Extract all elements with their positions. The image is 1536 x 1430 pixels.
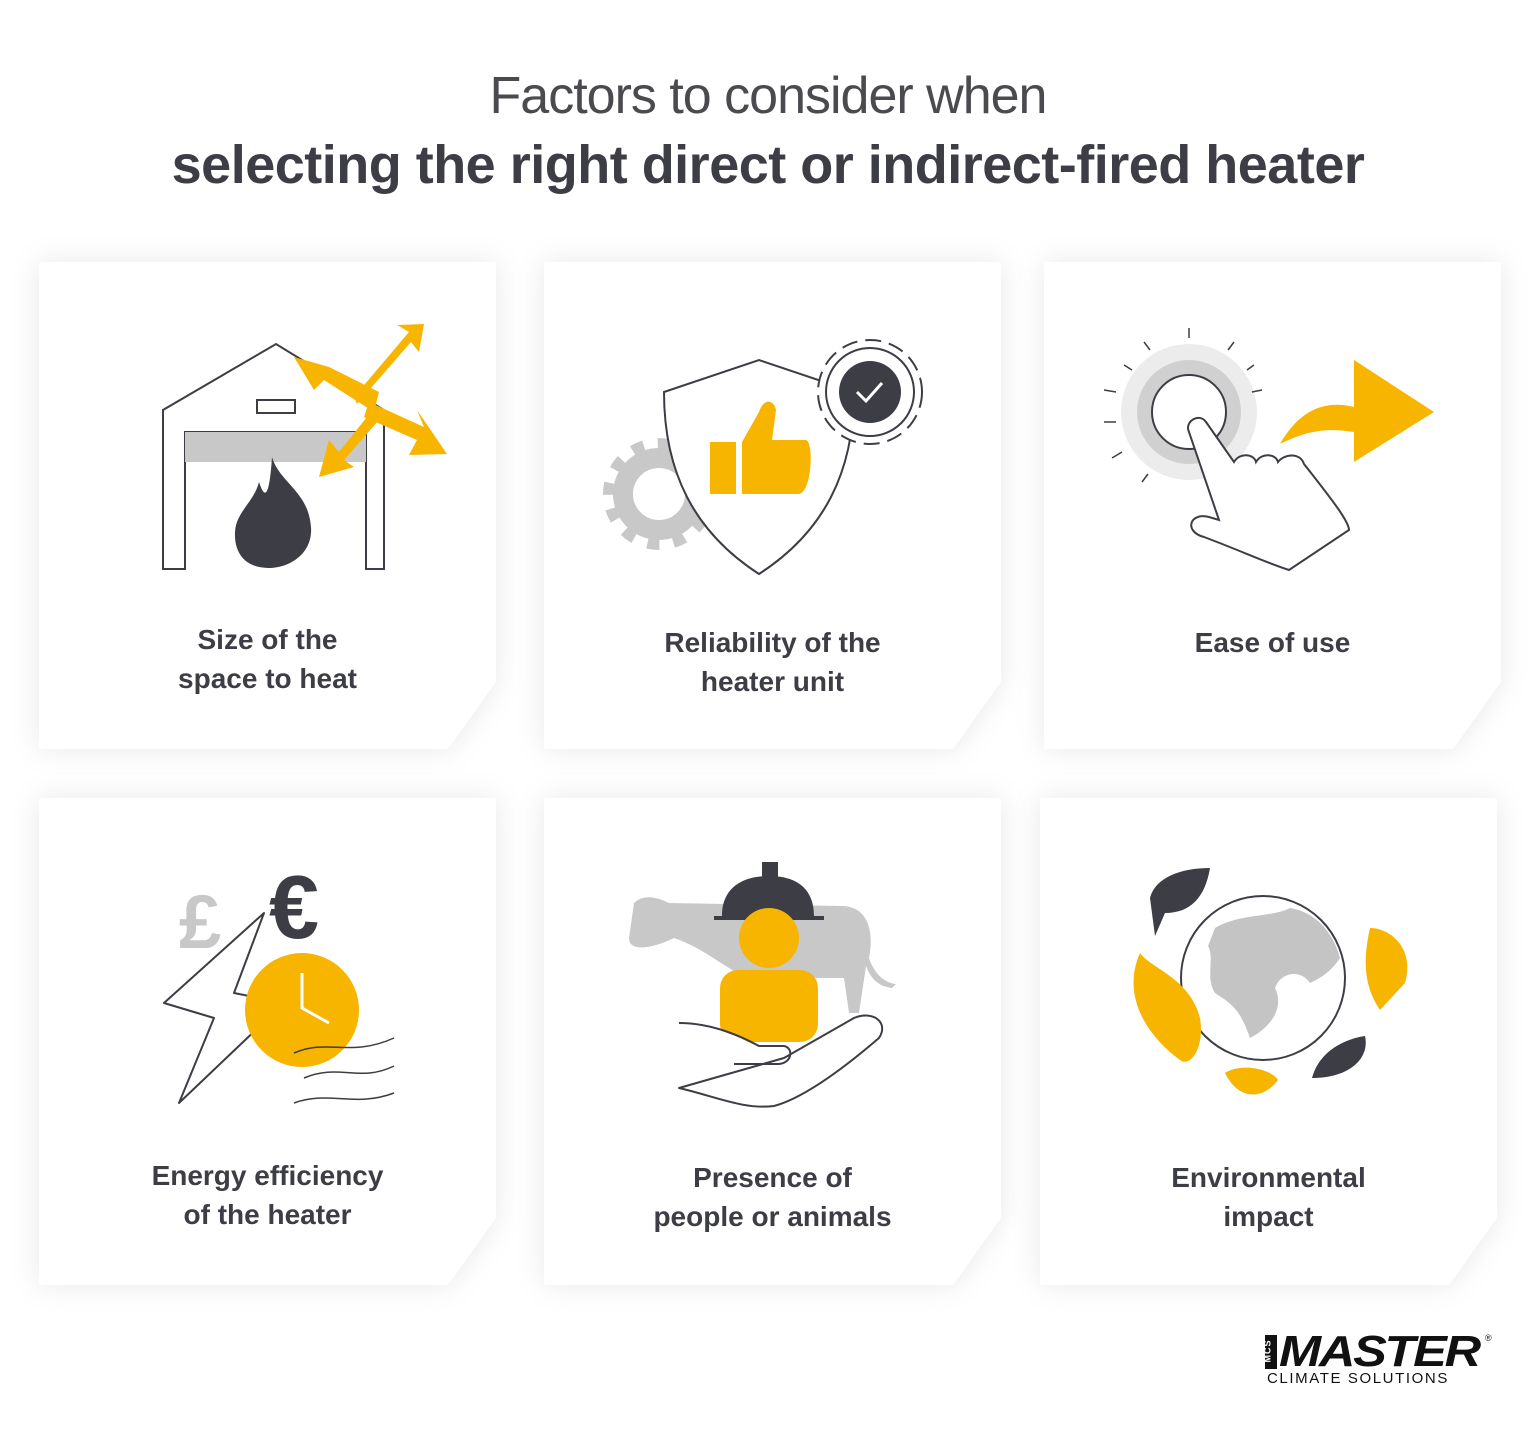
icon: shield with gear and thumb — [603, 339, 923, 576]
icon: globe with leaves — [1134, 868, 1408, 1094]
label: impact — [1223, 1201, 1314, 1232]
label — [154, 1165, 384, 1224]
icon: cow, worker, hand — [629, 862, 896, 1108]
icon: lightning, currency, clock — [163, 875, 394, 1104]
logo: MASTER — [1279, 1327, 1479, 1376]
label — [655, 1167, 890, 1232]
icon: lightning, currency, clock: £ — [179, 880, 221, 965]
title: Factors to consider when — [490, 67, 1046, 125]
logo: ® — [1485, 1333, 1492, 1343]
panel: environmental impact — [1036, 794, 1502, 1290]
subtitle: selecting the right direct or indirect-fired heater — [172, 135, 1364, 195]
label: Ease of use — [1195, 627, 1350, 658]
panel: energy efficiency — [34, 794, 500, 1290]
label: of the heater — [183, 1199, 352, 1230]
label — [179, 629, 357, 694]
label: Energy efficiency — [152, 1160, 383, 1191]
icon: lightning, currency, clock: € — [269, 858, 319, 958]
panel: ease of use — [1040, 258, 1506, 754]
label: Environmental — [1171, 1162, 1366, 1193]
logo: CLIMATE SOLUTIONS — [1267, 1370, 1449, 1387]
label: people or animals — [653, 1201, 892, 1232]
panel: reliability — [540, 258, 1006, 754]
panel: people or animals — [540, 794, 1006, 1290]
icon: building with arrows — [162, 324, 447, 570]
label: space to heat — [178, 663, 357, 694]
label — [666, 632, 880, 692]
label: heater unit — [701, 666, 844, 697]
label: Presence of — [693, 1162, 852, 1193]
icon: hand pressing button — [1104, 328, 1434, 572]
label: Reliability of the — [664, 627, 881, 658]
label: Size of the — [197, 624, 338, 655]
logo: MCS — [1262, 1340, 1272, 1362]
panel: size of space — [34, 258, 500, 754]
label — [1173, 1167, 1364, 1232]
